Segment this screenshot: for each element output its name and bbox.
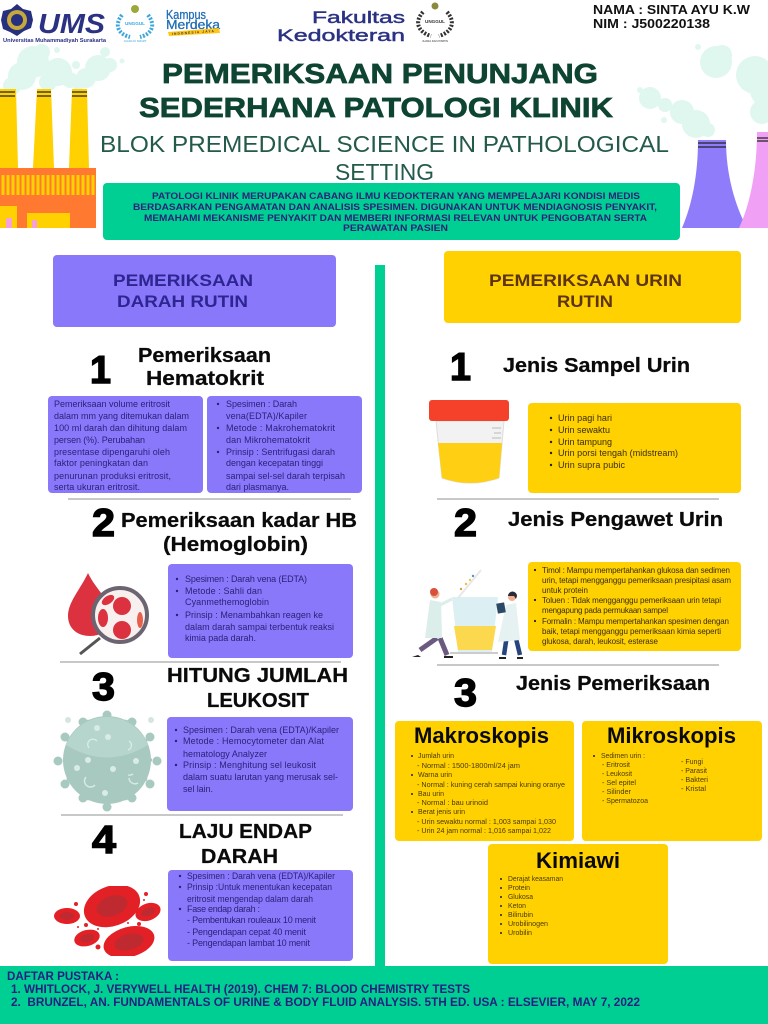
panel: kimiawi: Glukosa (508, 894, 533, 901)
panel: prosedur leukosit: Prinsip : Menghitung sel leukosit (183, 760, 316, 770)
heading: LEUKOSIT (207, 690, 309, 712)
heading (179, 821, 312, 868)
panel: mikroskopis: - Bakteri (681, 777, 708, 784)
panel: daftar pengawet: Formalin : Mampu mempertahankan spesimen dengan (542, 617, 729, 626)
panel: makroskopis: Bau urin (418, 791, 444, 798)
panel: daftar pengawet: baik, tetapi mengganggu pemeriksaan kimia seperti (542, 627, 721, 636)
icon: urine cup (429, 400, 509, 483)
smoke clouds left (3, 44, 124, 95)
logo: UMS wordmark: UMS (38, 8, 105, 39)
panel: kimiawi: Derajat keasaman (508, 876, 563, 883)
panel: prosedur LED: Fase endap darah : (187, 904, 260, 914)
panel: definisi hematokrit: 100 ml darah dan dihitung dalam (54, 423, 187, 433)
section urin 2: pengawet (412, 502, 741, 659)
panel: makroskopis: Makroskopis (414, 723, 549, 748)
section 4: laju endap darah (54, 819, 353, 963)
panel: prosedur hematokrit: dan Mikrohematokrit (226, 435, 310, 445)
panel: definisi hematokrit: Pemeriksaan volume eritrosit (54, 399, 170, 409)
heading: LAJU ENDAP (179, 821, 312, 843)
panel: prosedur hematokrit: Prinsip : Sentrifugasi darah (226, 447, 335, 457)
logo text: Fakultas Kedokteran: Kedokteran (277, 26, 405, 45)
panel: daftar sampel: Urin porsi tengah (midstream) (558, 448, 678, 458)
panel: mikroskopis: - Sel epitel (602, 780, 636, 787)
panel: daftar pengawet: glukosa, darah, leukosit, esterase (542, 637, 659, 646)
number 1: 1 (450, 346, 471, 389)
panel: kimiawi: Protein (508, 885, 530, 892)
panel: daftar pengawet: Timol : Mampu mempertahankan glukosa dan sedimen (542, 566, 730, 575)
panel: prosedur LED: - Pengendapan lambat 10 menit (187, 938, 310, 948)
panel: prosedur LED: - Pengendapan cepat 40 menit (187, 927, 306, 937)
panel: mikroskopis: - Eritrosit (602, 762, 630, 769)
panel: definition: BERDASARKAN PENGAMATAN DAN ANALISIS SPESIMEN. DIGUNAKAN UNTUK MENDIAGNOSIS PENYAKIT, (133, 202, 657, 213)
panel: kimiawi (488, 844, 668, 964)
panel: kimiawi: Urobilin (508, 930, 532, 937)
heading: HITUNG JUMLAH (167, 665, 348, 687)
footer: daftar pustaka (0, 966, 768, 1024)
logo: Fakultas wreath (418, 2, 452, 43)
heading: DARAH (201, 846, 278, 868)
panel: prosedur hematokrit: Spesimen : Darah (226, 399, 297, 409)
heading: Jenis Pengawet Urin (508, 509, 723, 531)
heading: urin rutin: PEMERIKSAAN URIN (489, 271, 682, 290)
panel: mikroskopis: - Silinder (602, 789, 632, 796)
panel: daftar pengawet: untuk protein (542, 586, 588, 595)
icon: red blood cells (54, 886, 160, 956)
panel: definisi hematokrit (48, 396, 203, 493)
heading: urin rutin: RUTIN (557, 292, 613, 311)
subtitle: SETTING (335, 159, 434, 185)
panel: definisi hematokrit: presentase dipengaruhi oleh (54, 447, 170, 457)
panel: prosedur hematokrit: dari plasmanya. (226, 482, 289, 492)
panel: mikroskopis: - Spermatozoa (602, 798, 648, 805)
logo: Fakultas wreath: JUARA DAN PIMPIN (422, 39, 448, 43)
heading (138, 345, 271, 390)
panel: prosedur hematokrit: sampai sel-sel darah terpisah (226, 471, 345, 481)
panel: prosedur leukosit: Metode : Hemocytometer dan Alat (183, 736, 324, 746)
panel: prosedur LED: - Pembentukan rouleaux 10 menit (187, 915, 316, 925)
section urin 3: jenis pemeriksaan (395, 672, 762, 964)
panel: makroskopis: Berat jenis urin (418, 809, 465, 816)
panel: prosedur hb: dalam darah sampai terbentuk reaksi (185, 622, 334, 632)
center divider bar (375, 265, 385, 967)
icon: factory left (0, 89, 96, 228)
panel: daftar sampel: Urin pagi hari (558, 413, 612, 423)
header logos (1, 2, 452, 45)
student name and id: NAMA : SINTA AYU K.W (593, 2, 751, 17)
title: SEDERHANA PATOLOGI KLINIK (139, 92, 613, 123)
panel: daftar pengawet (528, 562, 741, 651)
heading: Jenis Sampel Urin (503, 355, 690, 377)
illustration: scientists with urine sample (412, 570, 523, 659)
number 2: 2 (454, 502, 477, 545)
number 3: 3 (454, 672, 477, 715)
section 3: leukosit (54, 665, 353, 812)
number 4: 4 (92, 819, 116, 862)
logo text: Fakultas Kedokteran (277, 8, 405, 45)
panel: mikroskopis: - Fungi (681, 759, 703, 766)
icon: blood drop with magnifier (68, 573, 147, 654)
panel: prosedur hb: Metode : Sahli dan (185, 586, 262, 596)
student name and id: NIM : J500220138 (593, 16, 710, 31)
number 1: 1 (90, 349, 111, 392)
panel: daftar sampel (528, 403, 741, 493)
panel: prosedur hb: Cyanmethemoglobin (185, 597, 269, 607)
subtitle (100, 131, 669, 185)
number 2: 2 (92, 502, 115, 545)
panel: daftar sampel: Urin sewaktu (558, 425, 610, 435)
panel: prosedur LED: eritrosit mengendap dalam darah (187, 894, 313, 904)
logo text: Fakultas Kedokteran: Fakultas (312, 8, 405, 27)
panel: prosedur leukosit (167, 717, 353, 811)
heading: Jenis Pemeriksaan (516, 673, 710, 695)
panel: makroskopis: - Urin 24 jam normal : 1,016 sampai 1,022 (417, 828, 551, 835)
panel: mikroskopis (582, 721, 762, 841)
smoke clouds right (637, 44, 768, 138)
panel: prosedur hematokrit: vena(EDTA)/Kapiler (226, 411, 307, 421)
section 2: hemoglobin (68, 502, 357, 658)
heading: (Hemoglobin) (163, 534, 308, 556)
panel: prosedur LED: Prinsip :Untuk menentukan kecepatan (187, 882, 332, 892)
heading: darah rutin: PEMERIKSAAN (113, 271, 253, 290)
panel: prosedur hematokrit: dengan kecepatan tinggi (226, 458, 323, 468)
panel: makroskopis: - Urin sewaktu normal : 1,003 sampai 1,030 (417, 819, 556, 826)
panel: prosedur hb (168, 564, 353, 658)
panel: mikroskopis: - Leukosit (602, 771, 632, 778)
footer: daftar pustaka: 1. WHITLOCK, J. VERYWELL HEALTH (2019). CHEM 7: BLOOD CHEMISTRY TESTS (11, 984, 470, 996)
heading: darah rutin (53, 255, 336, 327)
logo: Unggul wreath (118, 5, 152, 43)
panel: mikroskopis: - Parasit (681, 768, 707, 775)
panel: prosedur hematokrit (207, 396, 362, 493)
title (139, 58, 613, 123)
panel: mikroskopis: - Kristal (681, 786, 706, 793)
title: PEMERIKSAAN PENUNJANG (162, 58, 598, 89)
panel: makroskopis: Warna urin (418, 772, 452, 779)
heading (121, 510, 357, 556)
panel: makroskopis (395, 721, 574, 841)
panel: kimiawi: Bilirubin (508, 912, 533, 919)
panel: daftar sampel: Urin supra pubic (558, 460, 626, 470)
panel: prosedur hematokrit: Metode : Makrohematokrit (226, 423, 335, 433)
icon: cooling towers right (682, 132, 768, 228)
panel: definisi hematokrit: penurunan produksi eritrosit, (54, 471, 171, 481)
panel: kimiawi: Keton (508, 903, 526, 910)
panel: mikroskopis: Mikroskopis (607, 723, 736, 748)
panel: makroskopis: - Normal : bau urinoid (417, 800, 488, 807)
panel: makroskopis: Jumlah urin (418, 753, 454, 760)
panel: prosedur hb: kimia pada darah. (185, 633, 256, 643)
panel: prosedur hb: Spesimen : Darah vena (EDTA) (185, 574, 307, 584)
logo: Kampus Merdeka (166, 7, 221, 36)
footer: daftar pustaka: DAFTAR PUSTAKA : (7, 971, 119, 983)
icon: leukocyte (54, 710, 162, 812)
panel: mikroskopis: Sedimen urin : (601, 753, 645, 760)
panel: definisi hematokrit: faktor peningkatan dan (54, 458, 148, 468)
panel: definisi hematokrit: persen (%). Perubahan (54, 435, 145, 445)
logo: Kampus Merdeka: INDONESIA JAYA (172, 29, 215, 36)
heading (167, 665, 348, 712)
panel: prosedur leukosit: hematology Analyzer (183, 749, 267, 759)
heading: urin rutin (444, 251, 741, 323)
section urin 1: jenis sampel (429, 346, 741, 493)
logo: Unggul wreath: JUARA DI SMART (123, 39, 147, 43)
panel: kimiawi: Kimiawi (536, 848, 620, 873)
panel: definisi hematokrit: serta ukuran eritrosit. (54, 482, 140, 492)
logo: Kampus Merdeka: Kampus (166, 7, 206, 22)
panel: kimiawi: Urobilinogen (508, 921, 548, 928)
student name and id (593, 2, 751, 31)
panel: prosedur LED (168, 870, 353, 961)
panel: makroskopis: - Normal : kuning cerah sampai kuning oranye (417, 782, 565, 789)
panel: daftar sampel: Urin tampung (558, 437, 612, 447)
logo: Unggul wreath: UNGGUL (125, 21, 145, 26)
panel: daftar pengawet: mengapung pada permukaan sampel (542, 606, 668, 615)
subtitle: BLOK PREMEDICAL SCIENCE IN PATHOLOGICAL (100, 131, 669, 157)
panel: prosedur leukosit: Spesimen : Darah vena (EDTA)/Kapiler (183, 725, 339, 735)
section 1: hematokrit (48, 345, 362, 493)
panel: definition: MEMAHAMI MEKANISME PENYAKIT DAN MEMBERI INFORMASI RELEVAN UNTUK PENGOBATAN SERTA (144, 213, 647, 224)
panel: definition: PATOLOGI KLINIK MERUPAKAN CABANG ILMU KEDOKTERAN YANG MEMPELAJARI KONDISI MEDIS (152, 191, 640, 202)
heading: Hematokrit (146, 368, 264, 390)
footer: daftar pustaka: 2. BRUNZEL, AN. FUNDAMENTALS OF URINE & BODY FLUID ANALYSIS. 5TH ED. USA : ELSEVIER, MAY 7, 2022 (11, 997, 640, 1009)
panel: prosedur leukosit: dalam suatu larutan yang merusak sel- (183, 772, 338, 782)
panel: prosedur LED: Spesimen : Darah vena (EDTA)/Kapiler (187, 871, 335, 881)
logo caption: Universitas Muhammadiyah Surakarta (3, 38, 107, 44)
panel: daftar pengawet: Toluen : Tidak mengganggu pemeriksaan urin tetapi (542, 596, 721, 605)
panel: definition: PERAWATAN PASIEN (343, 223, 448, 234)
panel: prosedur hb: Prinsip : Menambahkan reagen ke (185, 610, 323, 620)
panel: daftar pengawet: urin, tetapi mengganggu pemeriksaan presipitasi asam (542, 576, 731, 585)
panel: definition (103, 183, 680, 240)
logo: Kampus Merdeka: Merdeka (166, 17, 221, 32)
panel: makroskopis: - Normal : 1500-1800ml/24 jam (417, 763, 520, 770)
panel: definisi hematokrit: dalam mm yang ditemukan dalam (54, 411, 189, 421)
number 3: 3 (92, 666, 115, 709)
panel: prosedur leukosit: sel lain. (183, 784, 213, 794)
heading: darah rutin: DARAH RUTIN (117, 292, 248, 311)
logo: UMS emblem (1, 4, 33, 36)
heading: Pemeriksaan kadar HB (121, 510, 357, 532)
heading: Pemeriksaan (138, 345, 271, 367)
logo: Fakultas wreath: UNGGUL (425, 19, 445, 24)
